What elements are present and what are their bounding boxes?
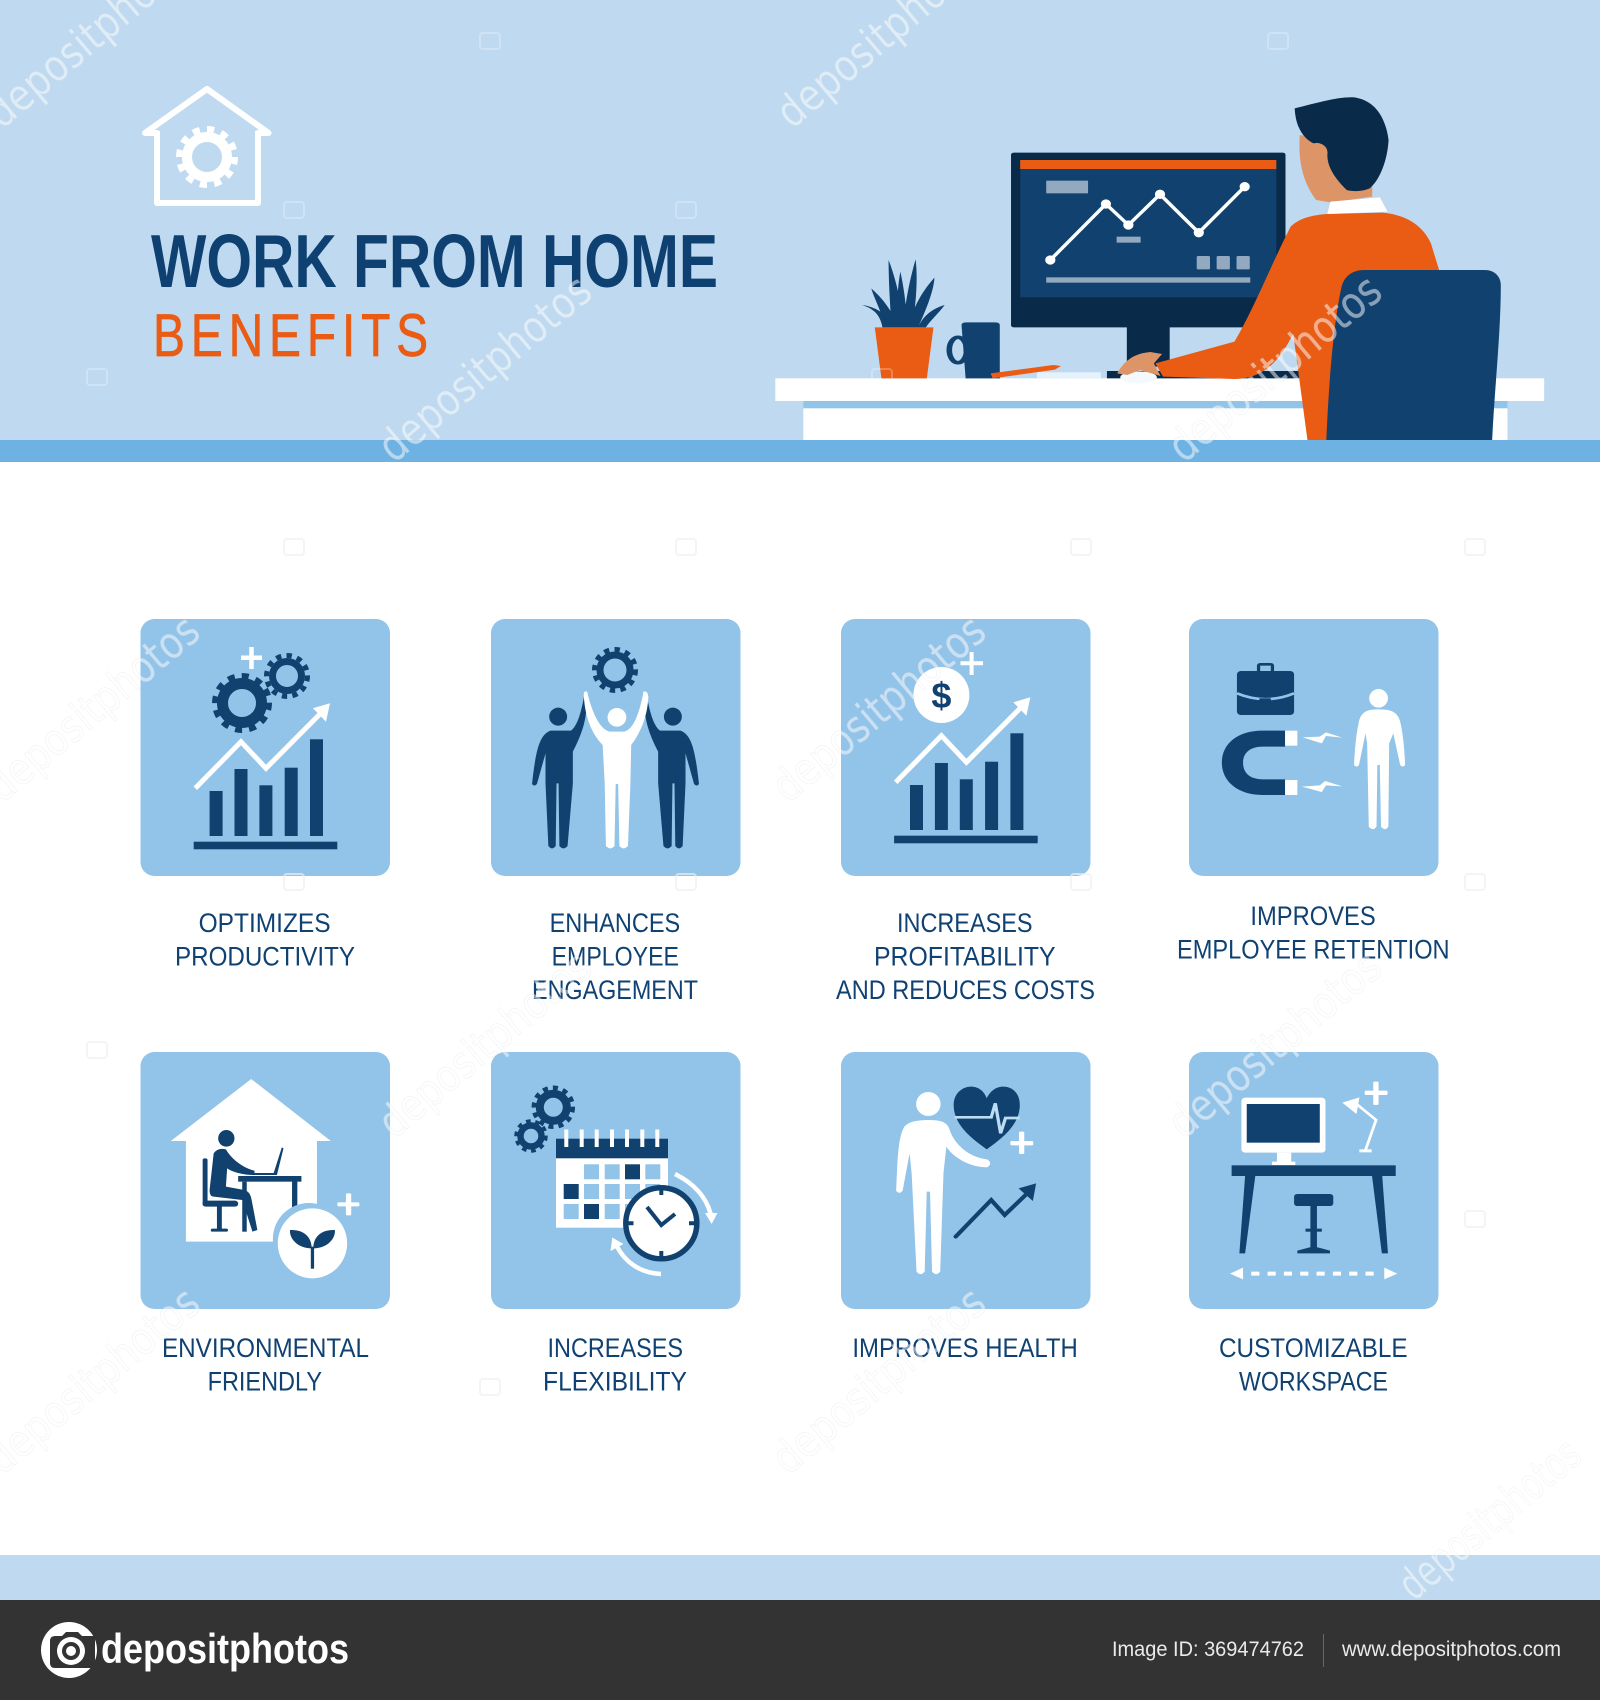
label: INCREASES	[897, 908, 1032, 938]
card: increases flexibility	[491, 1052, 740, 1396]
icon: dollar coin with chart	[894, 652, 1038, 843]
image id: Image ID: 369474762	[1112, 1638, 1304, 1661]
card: improves health	[841, 1052, 1090, 1363]
card: enhances employee engagement	[491, 619, 740, 1005]
head	[1295, 97, 1389, 214]
header panel	[0, 0, 1600, 462]
icon: dollar coin with chart: $	[931, 675, 951, 716]
label	[532, 908, 698, 1005]
icon: gears with chart	[194, 647, 337, 849]
plant	[862, 259, 945, 378]
card: environmental friendly	[140, 1052, 390, 1396]
card: increases profitability	[836, 619, 1095, 1005]
watermarks: depositphotos	[368, 941, 602, 1148]
icon: team raising gear	[532, 650, 699, 848]
watermarks: depositphotos	[762, 605, 996, 812]
label: PRODUCTIVITY	[175, 942, 355, 972]
bottom band	[0, 1555, 1600, 1600]
desk	[775, 378, 1544, 440]
label: IMPROVES	[1250, 901, 1376, 931]
label: ENVIRONMENTAL	[162, 1333, 369, 1363]
mug	[949, 322, 1000, 378]
icon: magnet, briefcase and person	[1222, 664, 1405, 829]
watermarks: depositphotos	[762, 1277, 996, 1484]
label: EMPLOYEE	[552, 942, 679, 972]
subtitle: BENEFITS	[153, 302, 428, 369]
watermarks: depositphotos	[1158, 265, 1392, 472]
pencil and paper	[991, 365, 1101, 378]
label	[175, 908, 355, 972]
label: EMPLOYEE RETENTION	[1177, 934, 1450, 964]
card: customizable workspace	[1189, 1052, 1438, 1396]
icon: desk, monitor and lamp	[1230, 1082, 1397, 1279]
label	[836, 908, 1095, 1005]
chair and sweater	[1117, 213, 1501, 440]
label: OPTIMIZES	[199, 908, 331, 938]
label: CUSTOMIZABLE	[1219, 1333, 1408, 1363]
label: ENHANCES	[550, 908, 680, 938]
logo: depositphotos: depositphotos	[101, 1625, 349, 1672]
label	[1177, 901, 1450, 964]
label	[543, 1333, 687, 1396]
label: PROFITABILITY	[874, 942, 1056, 972]
computer monitor	[1011, 153, 1286, 367]
logo: depositphotos	[41, 1622, 349, 1678]
title: WORK FROM HOME	[151, 219, 718, 303]
icon: calendar, clock and gears	[516, 1088, 718, 1274]
icon: house with gear	[145, 89, 268, 203]
watermarks: depositphotos	[1158, 941, 1392, 1148]
footer bar	[0, 1600, 1600, 1700]
card: improves employee retention	[1177, 619, 1450, 964]
keyboard	[1107, 371, 1301, 378]
label: INCREASES	[548, 1333, 683, 1363]
watermark camera marks	[87, 33, 1485, 1395]
illustration: person working at desk	[775, 97, 1544, 440]
icon: person with heart	[896, 1087, 1036, 1274]
label: WORKSPACE	[1239, 1366, 1388, 1396]
watermarks: depositphotos	[368, 265, 602, 472]
label: FLEXIBILITY	[543, 1366, 687, 1396]
label	[162, 1333, 369, 1396]
label: AND REDUCES COSTS	[836, 975, 1095, 1005]
label: FRIENDLY	[208, 1366, 322, 1396]
icon: home office with leaf	[171, 1079, 359, 1278]
label: ENGAGEMENT	[532, 975, 698, 1005]
label: IMPROVES HEALTH	[852, 1333, 1078, 1363]
card: optimizes productivity	[140, 619, 390, 972]
website: www.depositphotos.com	[1341, 1638, 1561, 1661]
label	[1219, 1333, 1408, 1396]
